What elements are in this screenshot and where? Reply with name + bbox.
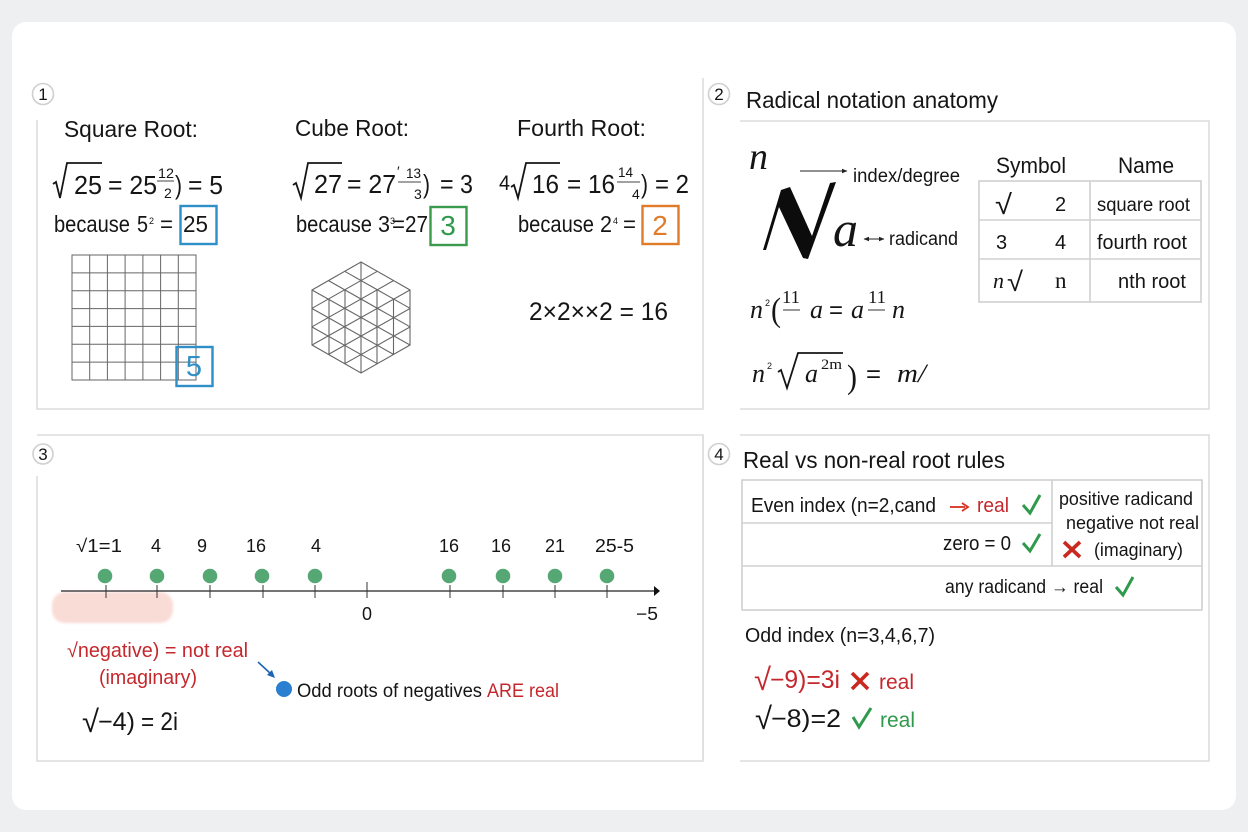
- arrow to index: [800, 170, 847, 172]
- exponent identity formula: n: [892, 295, 905, 324]
- exponent identity formula: 11: [868, 287, 886, 307]
- fourth root column: [499, 115, 689, 326]
- badge 2: [708, 84, 730, 104]
- product equation: 2×2××2 = 16: [529, 298, 668, 326]
- badge 1: 1: [38, 85, 48, 104]
- red note: negative radicand: (imaginary): [99, 667, 197, 689]
- equation: square root of 25: = 25: [108, 170, 157, 200]
- badge 4: [708, 444, 730, 464]
- example: root of minus four: −4): [98, 708, 135, 736]
- arrow to radicand: [864, 238, 884, 240]
- equation: fourth root of 16: [499, 163, 689, 202]
- negative region highlight: [52, 592, 173, 623]
- symbol table: 3: [996, 232, 1007, 254]
- example: minus eight: −8)=2: [771, 705, 841, 733]
- tick labels: 16: [246, 536, 266, 556]
- equation: cube root of 27: = 3: [440, 169, 473, 199]
- symbol table: 2: [1055, 194, 1066, 216]
- badge 3: [33, 444, 53, 464]
- equation: cube root of 27: 13: [406, 165, 421, 181]
- radicand label: radicand: [889, 229, 958, 250]
- panel 4: real vs non-real root rules: [703, 435, 1209, 761]
- equation: fourth root of 16: = 16: [567, 169, 615, 199]
- equation: square root of 25: = 5: [188, 170, 223, 200]
- because line with blue box: 5: [137, 211, 148, 237]
- because line with orange box: because: [518, 211, 594, 237]
- exponent identity formula: n: [750, 295, 763, 324]
- example: minus eight: real: [880, 709, 915, 732]
- tick labels: 16: [439, 536, 459, 556]
- symbol table: square root: [1097, 195, 1191, 216]
- radical power formula: 2: [767, 361, 772, 371]
- heading: square root: Square Root:: [64, 116, 198, 142]
- example: minus nine: real: [879, 671, 914, 694]
- example: root of minus four: √: [82, 704, 99, 739]
- isometric cube lattice: [312, 262, 410, 373]
- exponent identity formula: a: [851, 295, 864, 324]
- tick labels: 25-5: [595, 536, 634, 556]
- radical power formula: n: [752, 359, 765, 388]
- tick labels: 4: [151, 536, 161, 556]
- blue box 5: [176, 347, 212, 386]
- grid of squares: [72, 255, 196, 380]
- heading: real vs non-real: Real vs non-real root rules: [743, 447, 1005, 473]
- because line with green box: [296, 207, 466, 245]
- rules table: positive radicand: [1059, 488, 1193, 509]
- example: minus nine: [754, 662, 914, 697]
- radicand a: a: [833, 201, 858, 257]
- rules table: Even index (n=2,cand: [751, 495, 936, 517]
- because line with orange box: 4: [613, 216, 618, 226]
- rules table: (imaginary): [1094, 539, 1183, 560]
- square root column: [53, 116, 223, 386]
- because line with orange box: [518, 206, 678, 244]
- because line with green box: because: [296, 211, 372, 237]
- blue box 5: 5: [186, 351, 202, 383]
- symbol table: √: [1007, 267, 1023, 297]
- symbol table: Name: [1118, 153, 1174, 178]
- big radical sign: [763, 182, 836, 259]
- because line with blue box: =: [160, 211, 173, 237]
- example: minus nine: √: [754, 662, 771, 697]
- exponent identity formula: 11: [782, 287, 800, 307]
- example: root of minus four: = 2i: [141, 708, 178, 736]
- equation: fourth root of 16: 16: [532, 169, 559, 199]
- radical power formula: ): [847, 359, 857, 396]
- rules table: [742, 480, 1202, 610]
- equation: fourth root of 16: 4: [632, 186, 640, 202]
- symbol table: √: [995, 189, 1013, 220]
- equation: fourth root of 16: 14: [618, 164, 633, 180]
- example: minus eight: √: [755, 701, 772, 736]
- because line with blue box: 25: [183, 211, 208, 237]
- because line with blue box: [54, 206, 216, 244]
- equation: cube root of 27: 3: [414, 186, 422, 202]
- because line with green box: 3: [378, 211, 390, 237]
- equation: cube root of 27: [293, 163, 473, 202]
- example: root of minus four: [82, 704, 178, 739]
- equation: square root of 25: 25: [74, 170, 102, 200]
- because line with blue box: because: [54, 211, 130, 237]
- symbol table: n: [1055, 268, 1067, 293]
- symbol table: Symbol: [996, 153, 1066, 178]
- equation: square root of 25: ): [175, 170, 182, 200]
- heading: fourth root: Fourth Root:: [517, 115, 646, 141]
- equation: fourth root of 16: ): [641, 169, 648, 199]
- odd index heading: Odd index (n=3,4,6,7): [745, 625, 935, 647]
- badge 3: 3: [38, 445, 48, 464]
- badge 1: [32, 84, 54, 104]
- badge 4: 4: [714, 445, 724, 464]
- index label: index/degree: [853, 166, 960, 187]
- heading: radical notation anatomy: Radical notation anatomy: [746, 87, 998, 113]
- because line with orange box: 2: [652, 210, 668, 241]
- equation: square root of 25: [53, 163, 223, 201]
- tick labels: 9: [197, 536, 207, 556]
- odd roots note: [276, 680, 559, 702]
- symbol table: [979, 153, 1201, 302]
- panel 2: radical notation anatomy: [708, 84, 1209, 409]
- radical power formula: a: [805, 359, 818, 388]
- example: minus eight: [755, 701, 915, 736]
- rules table: any radicand → real: [945, 577, 1103, 598]
- radical power formula: 2m: [821, 357, 842, 373]
- red note: negative radicand: [67, 640, 248, 689]
- tick labels: 4: [311, 536, 321, 556]
- panel 1: root types: [32, 78, 703, 409]
- index n: n: [749, 136, 768, 178]
- because line with blue box: 2: [149, 216, 154, 226]
- symbol table: n: [993, 268, 1004, 293]
- radical power formula: =: [866, 361, 881, 388]
- radical power formula: m/: [897, 359, 929, 388]
- equation: cube root of 27: = 27: [347, 169, 396, 199]
- because line with green box: 3: [440, 210, 456, 241]
- equation: cube root of 27: ′: [397, 163, 400, 179]
- equation: square root of 25: 2: [164, 185, 172, 201]
- tick labels: √1=1: [76, 536, 122, 556]
- tick labels: −5: [636, 604, 658, 624]
- rules table: negative not real: [1066, 512, 1199, 533]
- because line with green box: =: [392, 211, 405, 237]
- equation: cube root of 27: ): [423, 169, 430, 199]
- odd roots note: ARE real: [487, 680, 559, 702]
- tick labels: 16: [491, 536, 511, 556]
- equation: fourth root of 16: 4: [499, 172, 510, 195]
- exponent identity formula: 2: [765, 298, 770, 308]
- symbol table: fourth root: [1097, 232, 1187, 254]
- panel 3: number line: [33, 435, 703, 761]
- exponent identity formula: =: [829, 297, 843, 324]
- because line with orange box: =: [623, 211, 636, 237]
- anatomy diagram: [749, 136, 960, 259]
- equation: square root of 25: 12: [158, 165, 174, 181]
- symbol table: 4: [1055, 232, 1066, 254]
- tick labels: [76, 536, 658, 624]
- radical power formula: [752, 353, 929, 396]
- equation: fourth root of 16: = 2: [655, 169, 689, 199]
- badge 2: 2: [714, 85, 724, 104]
- because line with green box: 3: [390, 216, 395, 226]
- number line: [61, 536, 660, 624]
- example: minus nine: −9)=3i: [770, 666, 840, 694]
- equation: cube root of 27: 27: [314, 169, 342, 199]
- tick labels: 0: [362, 604, 372, 624]
- cube root column: [293, 115, 473, 373]
- exponent identity formula: (: [771, 292, 781, 329]
- rules table: real: [977, 495, 1009, 517]
- red note: negative radicand: √negative) = not real: [67, 640, 248, 662]
- because line with orange box: 2: [600, 211, 612, 237]
- exponent identity formula: [750, 287, 905, 329]
- odd roots note: Odd roots of negatives: [297, 680, 482, 702]
- symbol table: nth root: [1118, 271, 1186, 293]
- rules table: zero = 0: [943, 533, 1011, 555]
- exponent identity formula: a: [810, 295, 823, 324]
- heading: cube root: Cube Root:: [295, 115, 409, 141]
- green dots: [98, 569, 614, 583]
- tick labels: 21: [545, 536, 565, 556]
- blue arrow: [258, 662, 275, 678]
- because line with green box: 27: [405, 211, 428, 237]
